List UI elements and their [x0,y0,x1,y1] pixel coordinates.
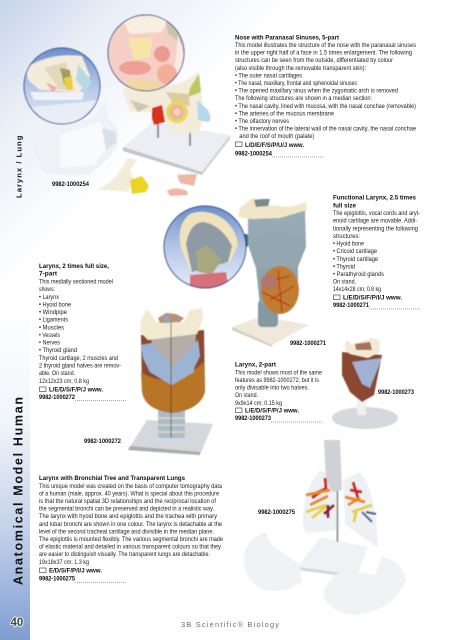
text block: Larynx, 2 times full size: • Hyoid bone [39,301,71,308]
text block: Functional Larynx: • Parathyroid glands [333,271,384,278]
detail circle: nasal cavity [108,15,190,96]
removable bone piece [98,158,137,192]
skull section [122,72,204,133]
text block: Nose with Paranasal Sinuses: (also visible through the removable transparent skin): [235,65,366,72]
text block: Larynx, 2-part: 9982-1000273 [235,415,271,422]
text block: Larynx, 2-part: On stand. [235,392,258,399]
text block: Nose with Paranasal Sinuses: Nose with Paranasal Sinuses, 5-part [235,34,340,41]
transparent skin shell [32,100,118,175]
text block: Functional Larynx: The epiglottis, vocal cords and aryt- [333,210,420,217]
text block: Larynx with Bronchial Tree and Transparent Lungs: 9982-1000275 [39,576,75,582]
text block: Nose with Paranasal Sinuses: • The opened maxillary sinus when the zygomatic arch is removed [235,88,398,95]
text block: Nose with Paranasal Sinuses [235,34,416,157]
text block: Larynx, 2 times full size: • Vessels [39,332,60,339]
text block: Nose with Paranasal Sinuses: • The nasal, maxillary, frontal and sphenoidal sinuses [235,80,357,87]
footer: 3B Scientific Biology: 3B Scientific® Biology [181,620,279,629]
text block: Functional Larynx [333,195,421,309]
text block: Nose with Paranasal Sinuses: • The outer nasal cartilages [235,72,302,79]
text block: Larynx, 2 times full size: • Larynx [39,294,60,301]
text block: Larynx, 2 times full size: This medially sectioned model [39,279,113,286]
text block: Larynx, 2 times full size: • Ligaments [39,317,68,324]
text block: Larynx with Bronchial Tree and Transparent Lungs: of a human (male, approx. 40 years). What is special about this procedure [39,490,219,497]
section label: Anatomical Model Human: Anatomical Model Human [12,397,26,585]
text block: Nose with Paranasal Sinuses: • The nasal cavity, lined with mucosa, with the nasal conchae (removable) [235,103,416,110]
text block: Larynx, 2 times full size: 12x12x23 cm; 0.8 kg [39,378,89,385]
text block: Larynx with Bronchial Tree and Transparent Lungs: The epiglottis is mounted flexibly. The various segmental bronchi are made [39,536,223,543]
text block: Larynx, 2-part: L/E/D/S/F/P/J www. [245,408,299,415]
text block: Larynx with Bronchial Tree and Transparent Lungs: are easier to distinguish visually. The transparent lungs are detachable. [39,551,210,558]
text block: Functional Larynx: On stand. [333,279,356,286]
marble base [123,122,230,172]
text block: Functional Larynx: enoid cartilage are movable. Addi- [333,218,417,225]
image: functional larynx model [232,198,309,347]
text block: Larynx, 2 times full size: L/E/D/S/F/P/J www. [49,387,103,394]
text block: Larynx, 2 times full size: • Thyroid gland [39,347,77,354]
text block: Larynx, 2-part: Larynx, 2-part [235,362,277,369]
image: lung model with bronchial tree [243,440,406,615]
product code: 9982-1000254: 9982-1000254 [52,181,90,188]
text block: Nose with Paranasal Sinuses: structures can be seen from the outside, differentiated by colour [235,57,394,64]
text block: Larynx, 2 times full size: 2 thyroid gland halves are remov- [39,362,121,370]
transparent lung shell right [323,557,406,615]
transparent lung shell left [243,532,302,591]
conchae pieces [177,174,197,186]
text block: Nose with Paranasal Sinuses: • The arteries of the mucous membrane [235,110,334,117]
text block: Nose with Paranasal Sinuses: 9982-1000254 [235,150,273,157]
text block: Larynx, 2-part: This model shows most of the same [235,370,322,376]
text block: Larynx with Bronchial Tree and Transparent Lungs: E/D/S/F/P/I/J www. [49,568,102,575]
text block: Larynx, 2 times full size: 7-part [39,271,58,278]
text block: Larynx, 2 times full size: • Muscles [39,324,64,331]
image: nose model with transparent skin and detail circles [24,15,230,196]
text block: Larynx with Bronchial Tree and Transparent Lungs: Larynx with Bronchial Tree and Transparent Lungs [39,475,185,482]
product code: 9982-1000271: 9982-1000271 [290,340,326,347]
text block: Functional Larynx: full size [333,202,356,209]
text block: Nose with Paranasal Sinuses: in the upper right half of a face in 1.5 times enlargement. The following [235,50,412,57]
text block: Larynx, 2-part: features as 9982-1000272, but it is [235,377,319,384]
text block: Larynx, 2 times full size: • Nerves [39,340,60,347]
text block: Functional Larynx: • Thyroid cartilage [333,256,378,263]
text block: Nose with Paranasal Sinuses: • The innervation of the lateral wall of the nasal cavity, the nasal conchae [235,126,416,133]
text block: Functional Larynx: tionally representing the following [333,225,418,232]
text block: Larynx, 2 times full size: shows: [39,286,55,293]
text block: Larynx, 2 times full size: Larynx, 2 times full size, [39,263,109,270]
text block: Larynx with Bronchial Tree and Transparent Lungs [39,475,223,582]
product code: 9982-1000272: 9982-1000272 [84,438,122,445]
product code: 9982-1000275: 9982-1000275 [258,509,296,516]
text block: Larynx with Bronchial Tree and Transparent Lungs: level of the second tracheal cartilage and divisible in the median plane. [39,528,214,535]
text block: Nose with Paranasal Sinuses: and the roof of mouth (palate) [239,133,314,140]
text block: Larynx, 2-part [235,362,323,422]
text block: Larynx with Bronchial Tree and Transparent Lungs: 19x18x37 cm; 1.3 kg [39,559,89,566]
text block: Larynx with Bronchial Tree and Transparent Lungs: The larynx with hyoid bone and epiglottis and the trachea with primary [39,513,218,520]
text block: Larynx, 2 times full size: Thyroid cartilage, 2 muscles and [39,355,118,362]
text block: Larynx with Bronchial Tree and Transparent Lungs: This unique model was created on the basis of computer tomography data [39,483,222,490]
text block: Larynx with Bronchial Tree and Transparent Lungs: of elastic material and detailed in various transparent colours so that they [39,544,222,551]
text block: Larynx, 2-part: 9x9x14 cm; 0.15 kg [235,400,282,407]
text block: Nose with Paranasal Sinuses: The following structures are shown in a median section: [235,95,372,102]
text block: Functional Larynx: Functional Larynx, 2.5 times [333,195,416,202]
text block: Nose with Paranasal Sinuses: This model illustrates the structure of the nose with the paranasal sinuses [235,42,416,49]
text block: Larynx, 2 times full size: • Windpipe [39,309,67,316]
text block: Functional Larynx: • Hyoid bone [333,240,364,248]
text block: Larynx, 2-part: only divisable into two halves. [235,385,309,392]
text block: Larynx, 2 times full size [39,263,126,401]
text block: Functional Larynx: 9982-1000271 [333,302,369,309]
text block: Larynx, 2 times full size: able. On stand. [39,370,75,377]
page number: 40 [10,617,23,629]
product code: 9982-1000273: 9982-1000273 [378,389,414,396]
text block: Larynx with Bronchial Tree and Transparent Lungs: is that the natural spatial 3D relationships and the reciprocal location of [39,498,216,505]
detail circle: model view [24,48,100,125]
text block: Nose with Paranasal Sinuses: L/D/E/F/S/P/U/J www. [245,142,304,149]
text block: Functional Larynx: • Thyroid [333,263,355,270]
text block: Functional Larynx: 14x14x28 cm; 0.8 kg [333,286,381,293]
text block: Functional Larynx: L/E/D/S/F/P/I/J www. [343,294,402,302]
text block: Functional Larynx: • Cricoid cartilage [333,248,377,255]
text block: Functional Larynx: structures: [333,233,360,240]
section label: Larynx / Lung: Larynx / Lung [14,135,24,198]
text block: Nose with Paranasal Sinuses: • The olfactory nerves [235,118,289,125]
text block: Larynx, 2 times full size: 9982-1000272 [39,394,75,401]
text block: Larynx with Bronchial Tree and Transparent Lungs: and lobar bronchi are shown in one colour. The larynx is detachable at the [39,521,222,528]
image: larynx 2-part model [332,338,398,429]
image: larynx 2x model [128,308,213,455]
text block: Larynx with Bronchial Tree and Transparent Lungs: the segmental bronchi can be preserved and depicted in a realistic way. [39,506,214,513]
image: larynx interior detail circle [164,206,246,292]
